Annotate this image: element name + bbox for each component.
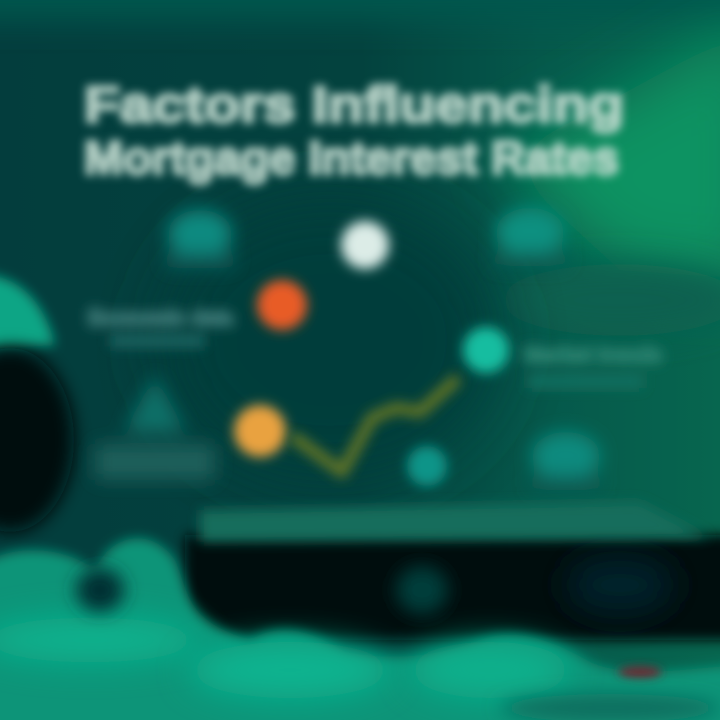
- bottom dark panel: [185, 535, 720, 640]
- icon: lower right teal factor: [530, 432, 602, 490]
- dark left silhouette: [0, 275, 74, 532]
- panel bar: horizontal band: [200, 502, 710, 542]
- title: [84, 76, 624, 184]
- text block: right label: Market trends: [524, 342, 662, 367]
- icon: lower left triangle factor: [95, 375, 215, 480]
- text block: left label: [88, 305, 234, 347]
- icon: top left teal factor: [165, 210, 235, 268]
- marker: orange-red circle: [257, 280, 307, 330]
- marker: turquoise circle: [463, 327, 509, 373]
- bottom teal waves: [0, 538, 720, 720]
- text block: right label: [524, 342, 662, 388]
- title: Factors Influencing: [84, 76, 624, 133]
- marker: small teal circle: [407, 446, 447, 486]
- icon: top right teal factor: [492, 208, 568, 266]
- line chart: olive trend: [292, 378, 458, 472]
- marker: amber circle: [234, 405, 286, 457]
- marker: white circle: [341, 221, 389, 269]
- title: Mortgage Interest Rates: [84, 131, 619, 184]
- text block: left label: Economic data: [88, 305, 234, 330]
